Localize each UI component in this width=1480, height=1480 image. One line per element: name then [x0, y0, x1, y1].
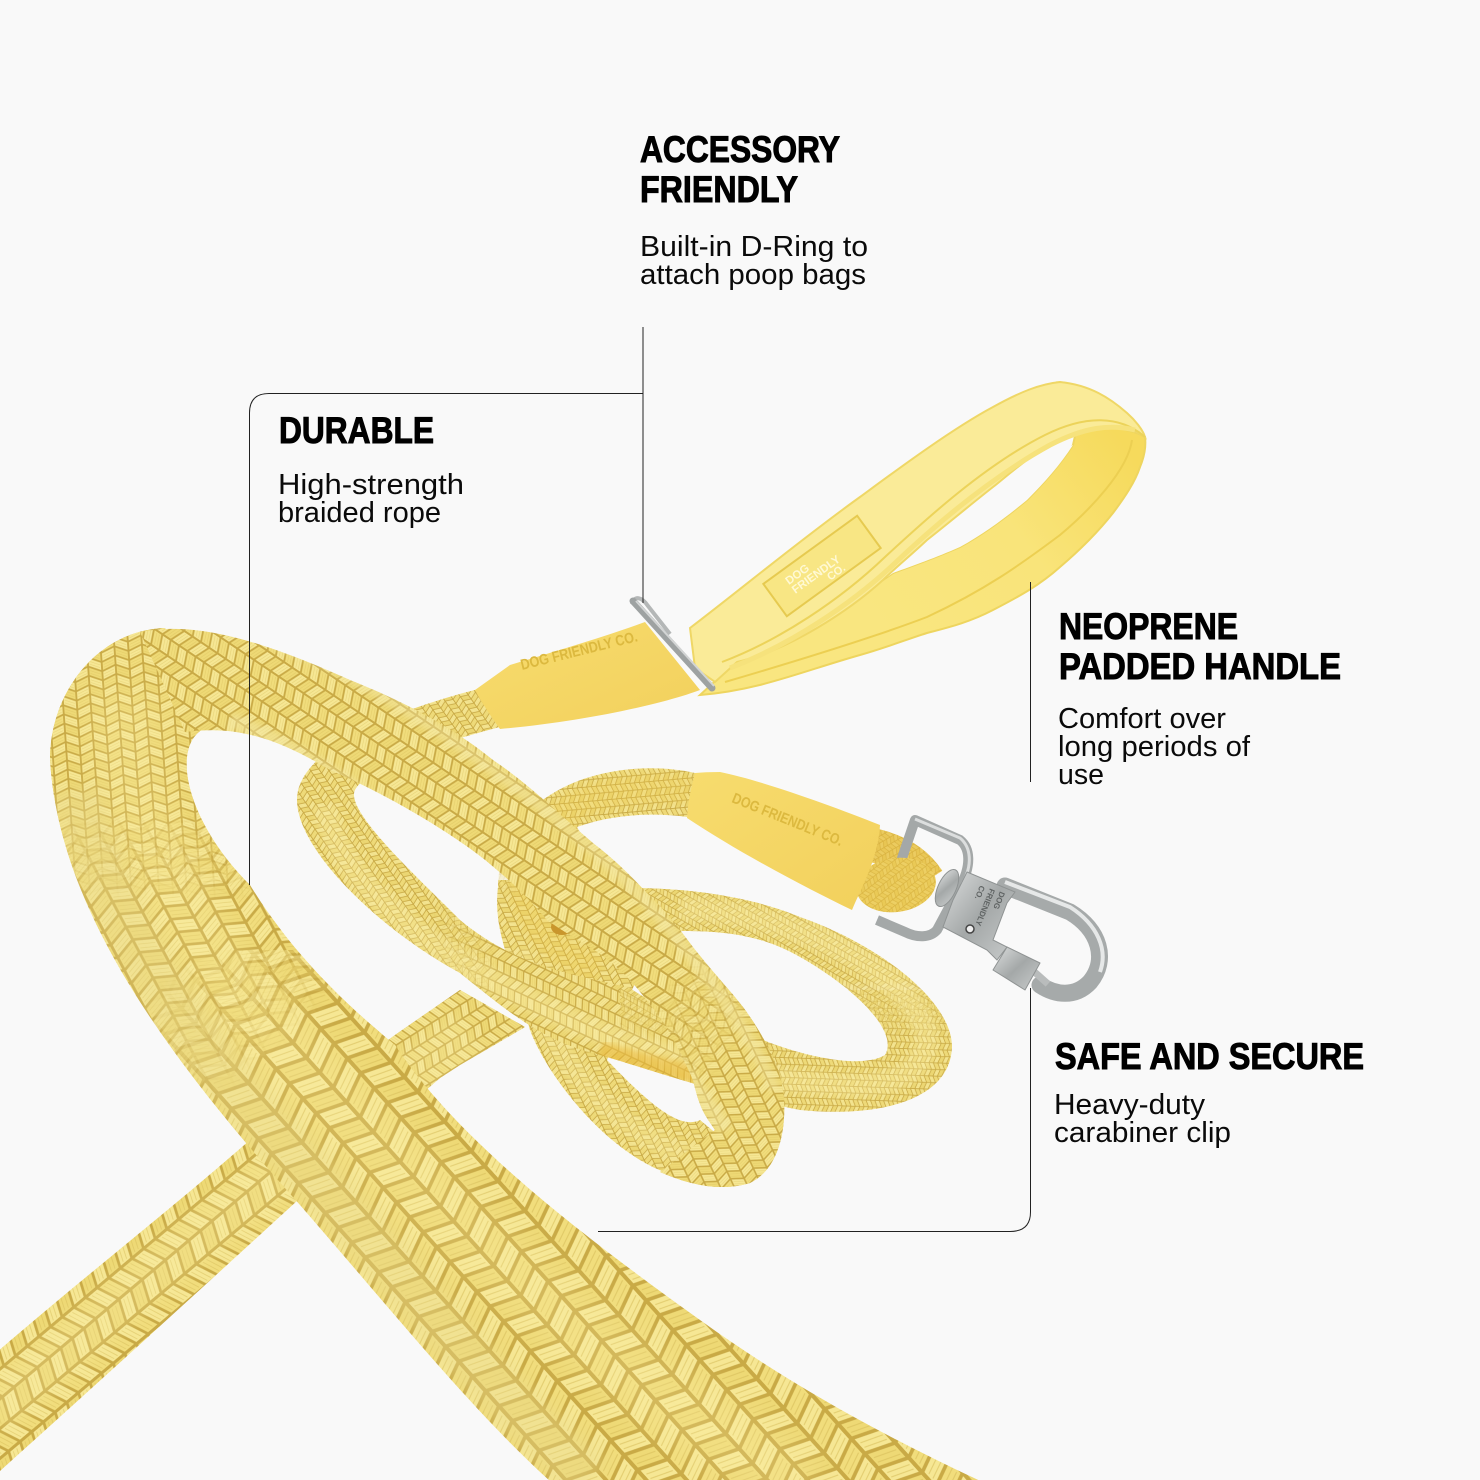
handle: logo patch: DOG [784, 562, 812, 588]
callout: accessory friendly [640, 129, 868, 291]
carabiner: swivel link [877, 820, 968, 936]
handle: top padded strap [690, 382, 1145, 682]
heading: accessory friendly [640, 129, 840, 210]
carabiner: collar [993, 947, 1040, 990]
carabiner: gate pin [1030, 968, 1048, 984]
rope: long inner loop [297, 690, 952, 1112]
carabiner: body with neck [943, 872, 1015, 960]
ferrule: handle: DOG FRIENDLY CO. [519, 628, 639, 674]
callout: safe and secure [1054, 1036, 1364, 1149]
rope: big upper section [140, 628, 784, 1187]
callout: neoprene padded handle [1058, 606, 1341, 791]
ferrule rope stub and carabiner clip: FRIENDLY [973, 887, 996, 928]
text: neoprene description [1058, 703, 1251, 791]
text: durable description: braided rope [278, 497, 441, 529]
heading: neoprene padded handle: PADDED HANDLE [1059, 646, 1341, 687]
text: durable description [278, 469, 464, 529]
ferrule: clip [687, 772, 880, 910]
text: safe and secure description: carabiner clip [1054, 1117, 1231, 1149]
heading: accessory friendly: FRIENDLY [640, 169, 798, 210]
text: safe and secure description: Heavy-duty [1054, 1089, 1206, 1121]
heading: neoprene padded handle: NEOPRENE [1059, 606, 1238, 647]
rope: big lower section [50, 628, 978, 1480]
handle: lining stitching [725, 440, 1132, 682]
leader line frame: safe and secure [598, 988, 1030, 1232]
rope: upper stub [872, 845, 928, 880]
carabiner: swivel collar [930, 866, 964, 910]
text: neoprene description: use [1058, 759, 1104, 791]
heading: accessory friendly: ACCESSORY [640, 129, 840, 170]
handle: logo patch [763, 516, 881, 616]
ferrule rope stub and carabiner clip: DOG [991, 890, 1006, 911]
rope: lower stub [853, 853, 939, 917]
handle: logo patch: CO. [825, 562, 848, 583]
ferrule rope stub and carabiner clip [687, 772, 1103, 993]
carabiner: hook [1005, 886, 1100, 993]
text: safe and secure description [1054, 1089, 1231, 1149]
handle: lower padded strap [700, 426, 1145, 695]
icon: D-ring [632, 598, 714, 688]
text: neoprene description: Comfort over [1058, 703, 1226, 735]
callout: durable [278, 410, 464, 529]
rope: lower ring to clip ferrule [497, 768, 714, 1171]
handle: loop opening [883, 445, 1073, 580]
text: neoprene description: long periods of [1058, 731, 1251, 763]
handle [690, 382, 1145, 695]
heading: neoprene padded handle [1059, 606, 1341, 687]
text: accessory description: attach poop bags [640, 259, 866, 291]
handle: logo patch: FRIENDLY [790, 553, 843, 596]
ferrule: handle [475, 622, 700, 729]
ferrule rope stub and carabiner clip: DOG FRIENDLY CO. [730, 790, 845, 850]
ferrule rope stub and carabiner clip: CO. [973, 884, 986, 901]
text: accessory description [640, 231, 868, 291]
leader line: neoprene handle [1030, 582, 1032, 782]
text: durable description: High-strength [278, 469, 464, 501]
leader line frame: durable and accessory [250, 327, 643, 885]
heading: safe and secure: SAFE AND SECURE [1055, 1036, 1364, 1077]
heading: durable: DURABLE [279, 410, 434, 451]
text: accessory description: Built-in D-Ring to [640, 231, 868, 263]
rope: lower-left strand [0, 980, 550, 1480]
